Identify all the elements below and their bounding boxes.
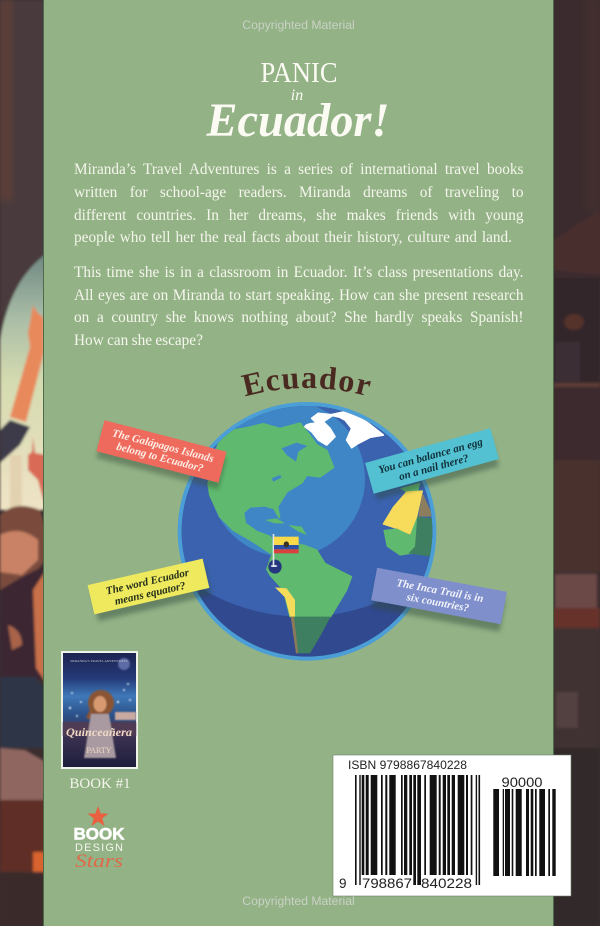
label: Book #1: BOOK #1	[69, 776, 131, 792]
note: Inca Trail: six countries?	[405, 591, 470, 615]
copyright watermark top: Copyrighted Material	[242, 18, 355, 32]
note: balance an egg	[365, 428, 501, 501]
barcode block: ISBN 9798867840228	[348, 760, 467, 772]
globe	[178, 402, 436, 661]
flag of Ecuador	[273, 534, 274, 567]
barcode block: 798867	[362, 876, 412, 891]
logo: Book Design Stars: Stars	[75, 851, 123, 872]
note: Galapagos: belong to Ecuador?	[115, 441, 205, 475]
globe infographic	[88, 366, 507, 661]
logo: Book Design Stars: BOOK	[74, 824, 125, 844]
North America	[208, 423, 333, 553]
barcode block: 840228	[421, 876, 472, 891]
Ecuador marker	[268, 560, 282, 574]
note: balance an egg: You can balance an egg	[377, 436, 485, 476]
book cover thumbnail: PARTY	[86, 746, 112, 755]
note: balance an egg: on a nail there?	[398, 452, 471, 483]
barcode block: 90000	[502, 775, 542, 790]
note: word Ecuador: means equator?	[114, 580, 187, 608]
Caribbean islands	[265, 518, 307, 535]
text block: story summary: on a country she knows nothing about? She hardly speaks Spanish!	[74, 309, 524, 326]
text block: story summary: How can she escape?	[74, 332, 203, 349]
Africa	[400, 483, 420, 493]
copyright watermark bottom: Copyrighted Material	[242, 894, 355, 908]
note: word Ecuador: The word Ecuador	[105, 567, 191, 598]
book cover thumbnail: Quinceañera	[66, 725, 132, 739]
logo: Book Design Stars: DESIGN	[75, 842, 123, 854]
note: word Ecuador	[88, 558, 212, 622]
barcode block: 9	[339, 876, 347, 891]
text block: series introduction: Miranda’s Travel Adventures is a series of international travel books	[74, 161, 524, 178]
note: Inca Trail	[370, 568, 507, 632]
title: in	[291, 87, 303, 104]
South America	[267, 543, 352, 617]
text block: story summary: This time she is in a classroom in Ecuador. It’s class presentations day.	[74, 264, 524, 281]
Arctic islands	[305, 413, 335, 445]
title: Ecuador!	[206, 94, 390, 147]
Greenland	[330, 411, 383, 448]
text block: series introduction: people who tell her the real facts about their history, culture and land.	[74, 229, 512, 246]
text block: story summary	[74, 264, 524, 349]
text block: series introduction: written for school-age readers. Miranda dreams of traveling to	[74, 184, 524, 201]
text block: series introduction	[74, 161, 524, 246]
heading: Ecuador: Ecuador	[240, 366, 371, 396]
title: PANIC	[260, 57, 338, 89]
text block: series introduction: different countries. In her dreams, she makes friends with young	[74, 207, 524, 224]
text block: story summary: All eyes are on Miranda to start speaking. How can she present research	[74, 287, 524, 304]
note: Inca Trail: The Inca Trail is in	[395, 577, 484, 605]
title	[206, 57, 390, 147]
note: Galapagos: The Galápagos Islands	[111, 427, 215, 465]
note: Galapagos	[95, 420, 228, 489]
book cover thumbnail: MIRANDA'S TRAVEL ADVENTURES	[70, 659, 128, 663]
